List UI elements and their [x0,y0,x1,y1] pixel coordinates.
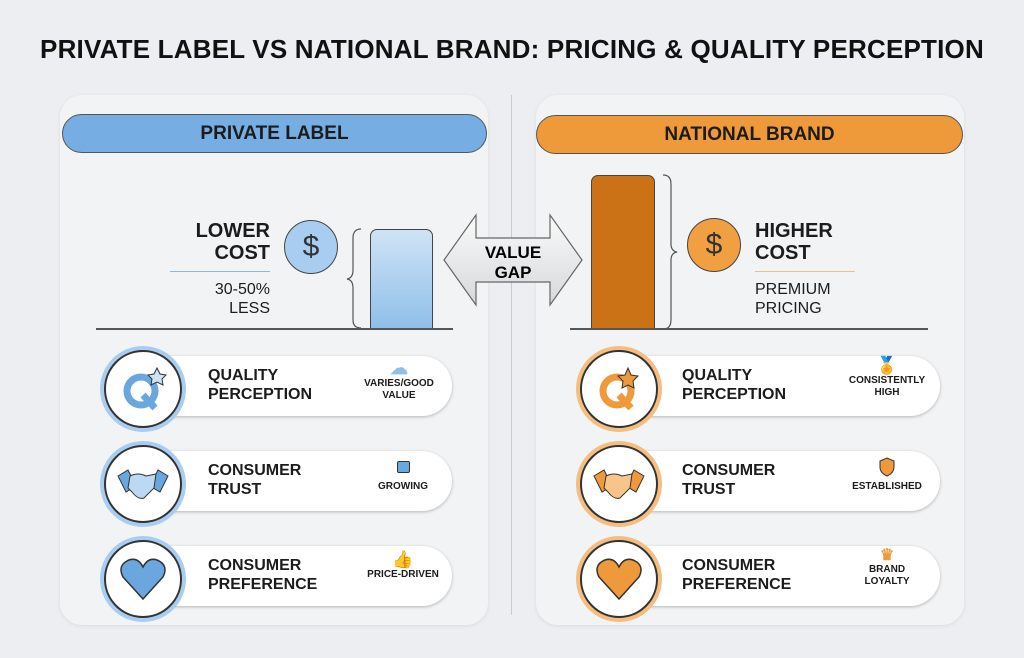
text: higher cost: PRICING [755,300,822,317]
row: right trust: TRUST [682,481,735,498]
row: right preference: BRAND [869,564,905,575]
text: higher cost [755,220,855,317]
row: left trust: CONSUMER [208,462,301,479]
row: left trust: TRUST [208,481,261,498]
row: left trust: GROWING [378,481,428,492]
arrow: value gap [443,213,583,307]
row: left quality: ☁ [390,358,408,378]
header: private label [62,114,487,153]
panel: private label [60,95,488,625]
icon: dollar coin orange: $ [706,228,722,261]
row: right quality: CONSISTENTLY [849,375,925,386]
baseline right [570,328,928,330]
bar: private label [370,229,433,329]
text: lower cost: LOWER [196,220,270,242]
text: higher cost: PREMIUM [755,281,831,298]
row: right quality [576,346,942,432]
row: right quality: PERCEPTION [682,386,786,403]
row: left quality: PERCEPTION [208,386,312,403]
row: right quality: QUALITY [682,367,752,384]
row: left quality: QUALITY [208,367,278,384]
row: right quality: 🏅 [876,356,898,375]
row: right preference: ♛ [880,547,894,564]
row: left quality: VARIES/GOOD [364,378,434,389]
row: right trust: ESTABLISHED [852,481,922,492]
row: left preference: PREFERENCE [208,576,317,593]
row: right preference: PREFERENCE [682,576,791,593]
row: right trust: CONSUMER [682,462,775,479]
row: left preference: PRICE-DRIVEN [367,569,439,580]
header: private label: PRIVATE LABEL [200,123,349,144]
row: right preference: LOYALTY [864,576,910,587]
row: right trust [576,441,942,527]
text: lower cost: COST [214,242,270,264]
text: lower cost: LESS [229,300,270,317]
row: left preference: 👍 [392,550,414,569]
row: right quality: HIGH [874,387,900,398]
row: right preference: CONSUMER [682,557,775,574]
center divider [511,95,512,615]
icon: dollar coin blue: $ [303,230,319,263]
arrow: value gap: GAP [495,263,531,282]
title: PRIVATE LABEL VS NATIONAL BRAND: PRICING & QUALITY PERCEPTION [40,34,984,64]
header: national brand: NATIONAL BRAND [664,124,835,145]
text: lower cost: 30-50% [215,281,270,298]
baseline left [96,328,453,330]
text: higher cost: COST [755,242,811,264]
row: left quality: VALUE [382,390,416,401]
icon: dollar coin blue [284,220,338,274]
brace left [346,228,361,328]
brace right [663,174,678,328]
header: national brand [536,115,963,154]
row: left quality [100,346,454,432]
row: left preference [100,536,454,622]
row: right preference [576,536,942,622]
text: lower cost [170,220,270,317]
panel: national brand [536,95,964,625]
row: left preference: CONSUMER [208,557,301,574]
row: left trust [100,441,454,527]
arrow: value gap: VALUE [485,243,541,262]
text: higher cost: HIGHER [755,220,833,242]
bar: national brand [591,175,655,329]
icon: dollar coin orange [687,218,741,272]
